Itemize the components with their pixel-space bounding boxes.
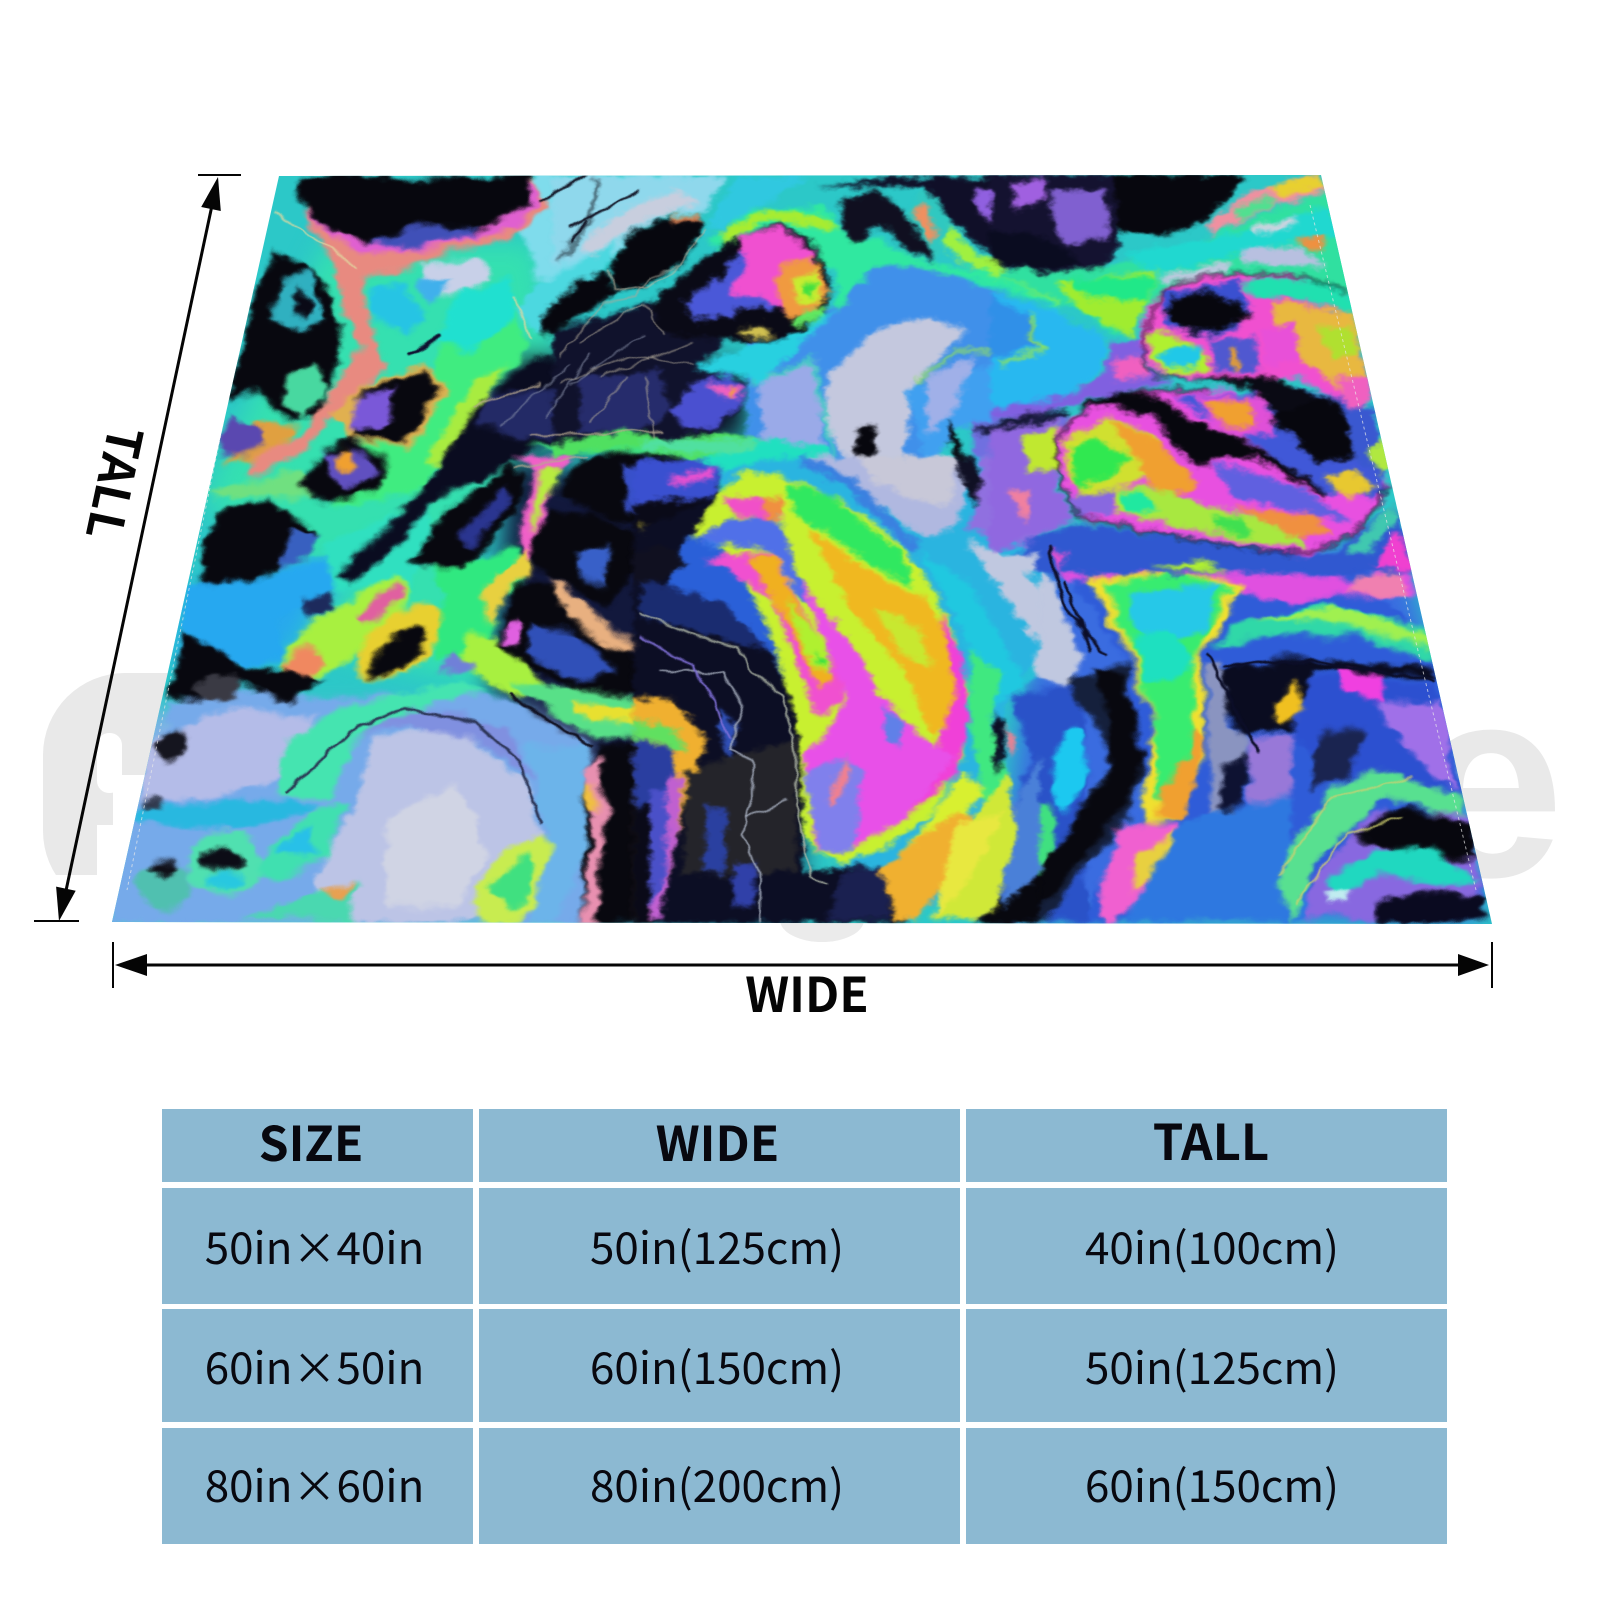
row 1 wide xyxy=(479,1188,960,1304)
header: size xyxy=(162,1109,473,1182)
row 2 wide: 60in(150cm) xyxy=(590,1332,844,1396)
rainbow xyxy=(690,472,968,863)
blue dome xyxy=(670,503,830,740)
label: wide: WIDE xyxy=(745,956,869,1026)
row 1 tall: 40in(100cm) xyxy=(1085,1213,1339,1277)
watermark: last letter: e xyxy=(1413,630,1564,934)
size table xyxy=(162,1104,1447,1544)
top left black blob xyxy=(298,177,531,245)
row 1 size xyxy=(162,1188,473,1304)
colour wash layer xyxy=(102,242,1484,926)
central rainbow swirl and dark veins xyxy=(633,440,1040,923)
yellow flow xyxy=(509,680,640,744)
watermark tint over black xyxy=(683,740,797,877)
outside left of big oval xyxy=(990,420,1077,553)
big left oval xyxy=(196,501,320,589)
fine veins xyxy=(276,171,1433,923)
upper centre: head, black ovals and lavender flow xyxy=(543,177,1067,470)
row 2 tall: 50in(125cm) xyxy=(1085,1332,1339,1396)
bottom black columns xyxy=(576,740,660,923)
top right streaks xyxy=(1207,173,1327,233)
black lower left xyxy=(171,630,327,701)
navy gradient under dome xyxy=(640,580,780,653)
right mid bands xyxy=(1208,604,1435,666)
web xyxy=(553,303,747,447)
row 3 tall xyxy=(966,1428,1447,1544)
row 1 wide: 50in(125cm) xyxy=(590,1213,844,1277)
row 2 size xyxy=(162,1309,473,1422)
green diagonal web xyxy=(306,313,526,507)
dark curved band xyxy=(973,681,1091,921)
watermark: descender below blanket xyxy=(780,898,864,942)
row 2 wide xyxy=(479,1309,960,1422)
row 3 wide: 80in(200cm) xyxy=(590,1450,844,1514)
left half of marble xyxy=(107,176,724,923)
base teal xyxy=(720,457,1040,923)
blanket illustration with dimension arrows xyxy=(34,174,1564,1026)
row 3 tall: 60in(150cm) xyxy=(1085,1450,1339,1514)
green band xyxy=(553,430,767,460)
arrow: wide dimension xyxy=(113,942,1492,988)
marble shapes: outer regions xyxy=(107,176,1489,923)
top left black blob rim xyxy=(306,181,551,349)
row 2 size: 60in×50in xyxy=(205,1332,424,1396)
dark diagonal band xyxy=(334,352,558,588)
web veins xyxy=(560,230,703,437)
pink vertical strip xyxy=(515,454,577,579)
head xyxy=(650,223,832,343)
big oval xyxy=(1057,390,1387,557)
middle elongated black xyxy=(411,466,526,569)
header: tall: TALL xyxy=(1153,1104,1269,1175)
header: tall xyxy=(966,1109,1447,1182)
iridescent lower-left spots xyxy=(188,832,261,897)
row 1 size: 50in×40in xyxy=(205,1213,424,1277)
light streak area top xyxy=(520,176,714,283)
purple band xyxy=(990,337,1173,420)
left veins xyxy=(276,171,663,824)
dark ground xyxy=(633,493,907,923)
marble shapes: centre and upper right, feathered xyxy=(543,173,1420,923)
header: size: SIZE xyxy=(259,1104,363,1174)
black ovals xyxy=(608,217,703,292)
row 2 tall xyxy=(966,1309,1447,1422)
upper oval xyxy=(1140,273,1373,410)
left lobe xyxy=(640,440,767,453)
lobe xyxy=(670,375,745,430)
upper right ovals xyxy=(990,173,1420,573)
below oval xyxy=(990,503,1420,573)
top right dark xyxy=(817,177,1067,287)
right veins xyxy=(1050,548,1433,905)
top black + swirl xyxy=(1107,173,1247,237)
cyan band xyxy=(182,554,335,670)
green flow xyxy=(707,207,1060,313)
bottom right rings xyxy=(1127,793,1310,921)
left of oval xyxy=(1030,571,1088,689)
top left streaks xyxy=(553,177,727,267)
arrow: tall dimension xyxy=(34,175,241,921)
purple black blob xyxy=(332,359,449,451)
blanket with iridescent marble pattern xyxy=(100,170,1500,930)
centre veins xyxy=(640,613,827,923)
row 3 size: 80in×60in xyxy=(205,1450,424,1514)
large central-right flow xyxy=(1045,538,1489,921)
cyan blob xyxy=(990,293,1107,410)
left edge black column xyxy=(230,252,342,418)
stitching along blanket edges xyxy=(127,205,1476,890)
pills xyxy=(278,572,412,682)
oval rims xyxy=(1143,273,1347,378)
header: wide xyxy=(479,1109,960,1182)
row 3 size xyxy=(162,1428,473,1544)
right half of marble xyxy=(922,538,1489,923)
lower centre lobes xyxy=(556,451,724,523)
bottom right xyxy=(970,413,1067,470)
watermark: rounded first letter behind blanket xyxy=(40,673,280,925)
bug xyxy=(857,427,877,460)
row 1 tall xyxy=(966,1188,1447,1304)
label: tall: TALL xyxy=(72,421,164,547)
lower left iridescent arch xyxy=(633,697,707,923)
cyan band xyxy=(693,310,837,383)
black stripe xyxy=(1283,383,1383,477)
blue lavender lower left xyxy=(107,688,587,923)
header: wide: WIDE xyxy=(656,1104,779,1174)
teal pocket xyxy=(372,278,429,331)
row 3 wide xyxy=(479,1428,960,1544)
outer rim xyxy=(883,773,987,920)
